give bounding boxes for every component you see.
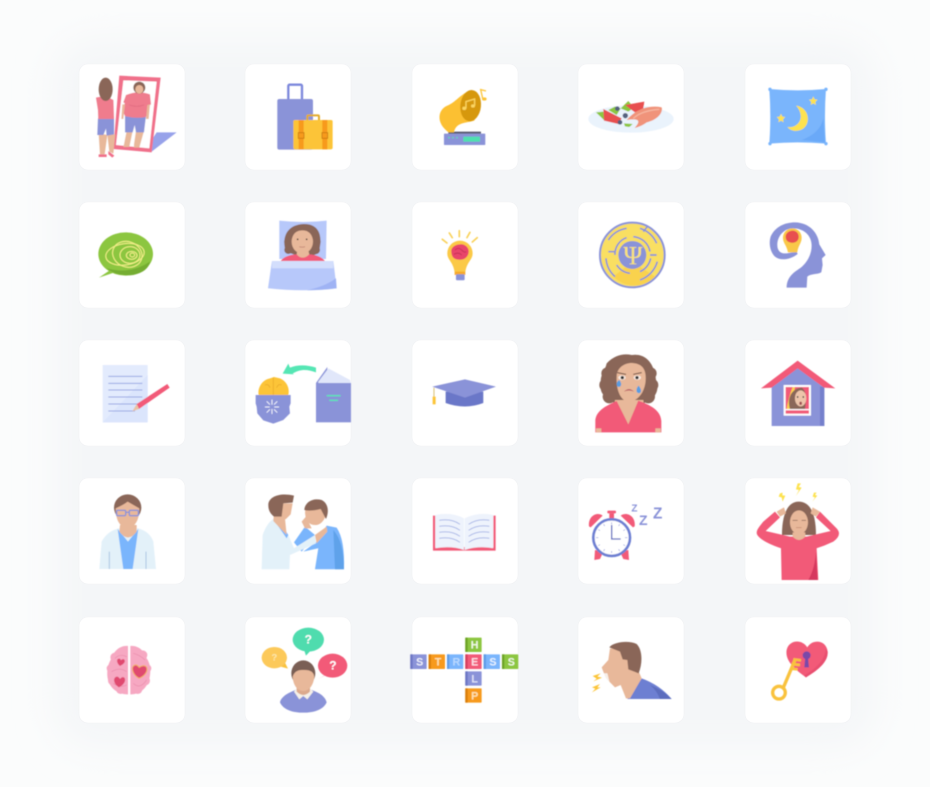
icon: house with photo xyxy=(761,361,835,426)
panel: luggage xyxy=(245,64,351,170)
panel: pillow xyxy=(745,64,851,170)
icon: shouting man profile xyxy=(592,642,672,699)
icon: STRESS HELP letter tiles: S xyxy=(508,657,515,669)
panel: woman in bed xyxy=(245,202,351,308)
icon: therapist comforting patient xyxy=(262,495,344,569)
icon: woman lying in bed xyxy=(268,221,337,290)
panel: brain with hearts xyxy=(79,617,185,723)
icon: gramophone xyxy=(439,89,487,145)
icon: STRESS HELP letter tiles: S xyxy=(489,657,497,669)
icon: man with question bubbles: ? xyxy=(329,659,337,673)
panel: mind head xyxy=(745,202,851,308)
icon: woman holding head with stress bolts xyxy=(757,483,839,580)
icon: alarm clock and Z letters xyxy=(589,503,662,560)
icon: crying woman xyxy=(595,354,661,432)
panel: writing notes xyxy=(79,340,185,446)
icon: STRESS HELP letter tiles: L xyxy=(471,673,478,685)
panel: graduation xyxy=(412,340,518,446)
icon: alarm clock and Z letters: Z xyxy=(653,506,662,523)
icon: STRESS HELP letter tiles: E xyxy=(471,657,478,669)
panel: stressed woman xyxy=(745,478,851,584)
panel: confused speech xyxy=(79,202,185,308)
icon: alarm clock and Z letters: Z xyxy=(631,503,637,514)
icon: psi symbol maze: Ψ xyxy=(623,241,643,270)
icon: STRESS HELP letter tiles: P xyxy=(471,690,478,702)
icon: STRESS HELP letter tiles: R xyxy=(452,657,460,669)
panel: stress help crossword xyxy=(410,617,518,723)
icon: green speech bubble with scribble xyxy=(98,232,153,278)
icon: man with question bubbles: ? xyxy=(271,653,277,663)
panel: shouting man xyxy=(578,617,684,723)
icon: open book xyxy=(433,514,496,551)
icon: man with question bubbles: ? xyxy=(305,633,312,647)
icon: graduation cap xyxy=(432,379,496,406)
panel: psychology maze xyxy=(578,202,684,308)
icon: STRESS HELP letter tiles xyxy=(410,638,518,703)
panel: idea bulb xyxy=(412,202,518,308)
panel: home portrait xyxy=(745,340,851,446)
panel: heart and key xyxy=(745,617,851,723)
icon: night pillow with moon xyxy=(768,88,828,145)
icon: salmon and salad xyxy=(588,101,674,133)
panel: gramophone xyxy=(412,64,518,170)
panel: brain learning from book xyxy=(245,340,351,446)
icon: STRESS HELP letter tiles: H xyxy=(471,640,478,652)
panel: alarm clock xyxy=(578,478,684,584)
panel: person with questions xyxy=(245,617,351,723)
panel: open book xyxy=(412,478,518,584)
panel: food plate xyxy=(578,64,684,170)
icon: STRESS HELP letter tiles: T xyxy=(435,657,442,669)
icon: man with question bubbles xyxy=(262,628,347,713)
icon: book loading into brain xyxy=(256,364,351,424)
icon: alarm clock and Z letters: Z xyxy=(639,512,648,528)
icon: paper and pencil xyxy=(103,365,170,422)
panel: crying woman xyxy=(578,340,684,446)
panel: mirror body image xyxy=(79,64,185,170)
icon: woman looking in mirror xyxy=(96,76,177,158)
icon: key unlocking heart xyxy=(773,641,828,699)
panel: doctor xyxy=(79,478,185,584)
icon: head profile with bulb xyxy=(770,222,826,288)
panel: therapist and patient xyxy=(245,478,351,584)
icon: pink brain with hearts xyxy=(107,646,151,694)
icon: STRESS HELP letter tiles: S xyxy=(416,657,423,669)
icon: suitcase and briefcase xyxy=(277,85,333,150)
icon: lightbulb with brain xyxy=(442,231,477,280)
icon: doctor with glasses xyxy=(99,494,156,569)
